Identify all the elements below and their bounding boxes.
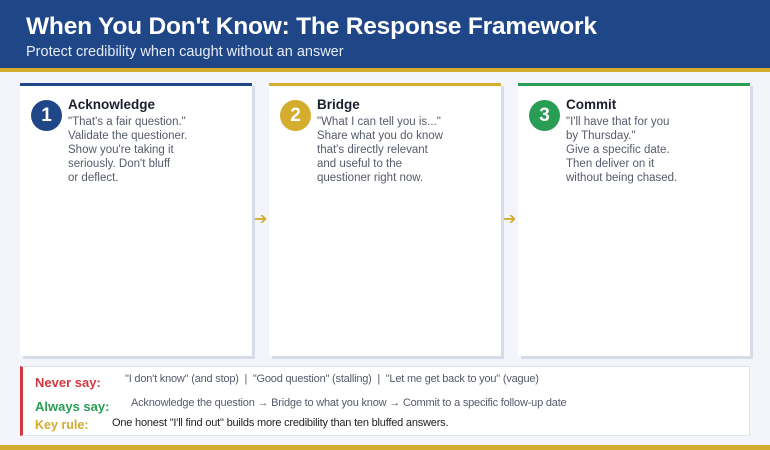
text: commit: Then deliver on it [566,158,654,170]
header [0,0,770,68]
text: key rule: One honest "I'll find out" builds more credibility than ten bluffed answers. [112,417,448,429]
text: commit: Give a specific date. [566,144,670,156]
text: bridge: that's directly relevant [317,144,428,156]
text: bridge: "What I can tell you is..." [317,116,441,128]
icon: number 3: 3 [539,105,550,126]
panel: acknowledge [20,83,252,356]
arrow: ➔ [254,211,267,228]
panel: bridge [269,83,501,356]
subtitle: Protect credibility when caught without an answer [26,44,344,60]
panel: commit [518,83,750,356]
text: acknowledge: or deflect. [68,172,118,184]
icon: number 3 [529,100,560,131]
text: bridge: Share what you do know [317,130,443,142]
text: commit: "I'll have that for you [566,116,669,128]
text: never say: "I don't know" (and stop) | "Good question" (stalling) | "Let me get back to you" (vague) [125,373,539,385]
text: acknowledge: "That's a fair question." [68,116,186,128]
icon: number 2: 2 [290,105,301,126]
heading: bridge: Bridge [317,97,360,112]
icon: number 1: 1 [41,105,52,126]
text: bridge [317,116,443,184]
label: always say: Always say: [35,399,109,414]
text: acknowledge [68,116,187,184]
panel: rules [20,366,750,436]
heading: commit: Commit [566,97,616,112]
text: bridge: questioner right now. [317,172,423,184]
icon: number 1 [31,100,62,131]
text: always say: Acknowledge the question → Bridge to what you know → Commit to a specific follow-up date [131,397,566,409]
text: commit: by Thursday." [566,130,636,142]
text: acknowledge: seriously. Don't bluff [68,158,170,170]
text: acknowledge: Show you're taking it [68,144,174,156]
icon: number 2 [280,100,311,131]
heading: acknowledge: Acknowledge [68,97,155,112]
label: never say: Never say: [35,375,101,390]
text: bridge: and useful to the [317,158,402,170]
title: When You Don't Know: The Response Framework [26,13,597,40]
arrow: ➔ [503,211,516,228]
text: acknowledge: Validate the questioner. [68,130,187,142]
text: commit: without being chased. [566,172,677,184]
label: key rule: Key rule: [35,418,88,432]
text: commit [566,116,677,184]
